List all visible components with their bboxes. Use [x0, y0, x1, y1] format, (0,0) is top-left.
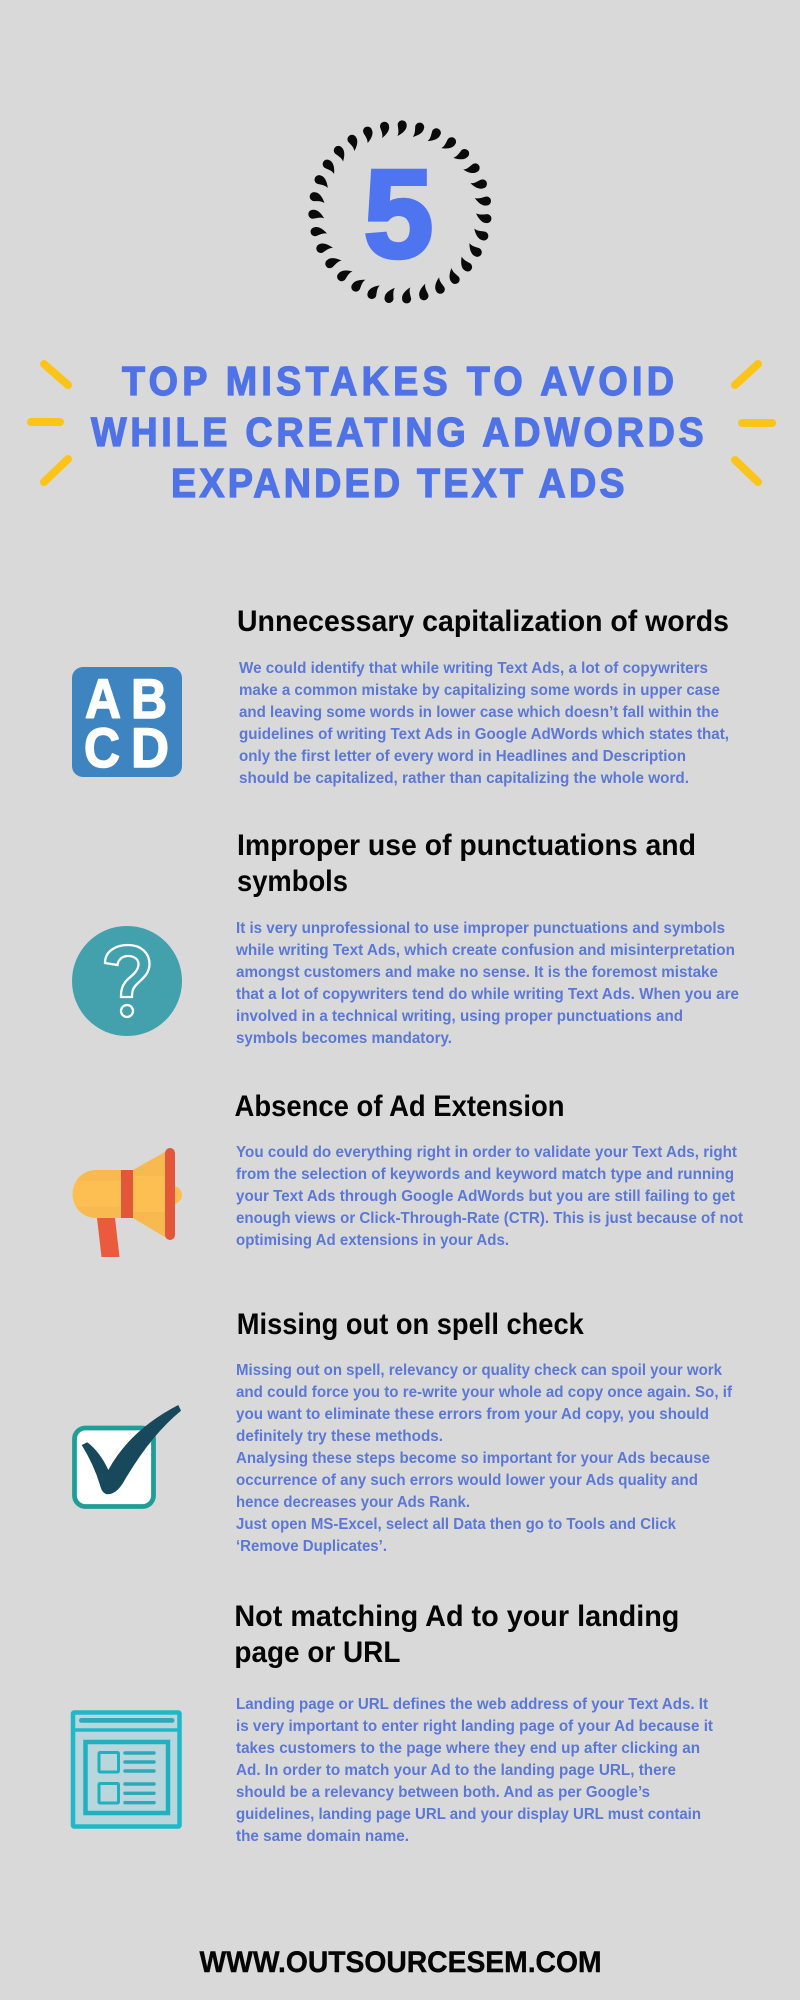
number 5: 5: [364, 146, 433, 284]
icon: ABCD tile: A: [85, 667, 121, 730]
body text: the same domain name.: [236, 1828, 409, 1845]
body text: You could do everything right in order to validate your Text Ads, right: [236, 1144, 738, 1161]
heading: Improper use of punctuations and: [237, 829, 696, 862]
heading: symbols: [237, 865, 348, 898]
badge: number five in a ring of drops: [308, 120, 492, 304]
body text: should be a relevancy between both. And as per Google’s: [236, 1784, 650, 1801]
title: WHILE CREATING ADWORDS: [91, 410, 704, 455]
heading: Missing out on spell check: [237, 1308, 584, 1341]
ring of teardrops: [308, 120, 492, 304]
icon: question mark circle: [72, 926, 182, 1036]
icon: check box: [74, 1405, 181, 1506]
title: [91, 359, 704, 506]
title block with yellow rays: [31, 359, 772, 506]
heading: [234, 1600, 679, 1669]
icon: megaphone: [72, 1148, 182, 1257]
body text: that a lot of copywriters tend do while writing Text Ads. When you are: [236, 986, 739, 1003]
body text: We could identify that while writing Text Ads, a lot of copywriters: [239, 660, 708, 677]
body text: [236, 1696, 714, 1845]
body text: symbols becomes mandatory.: [236, 1030, 452, 1047]
body text: ‘Remove Duplicates’.: [236, 1538, 387, 1555]
heading: Not matching Ad to your landing: [234, 1600, 679, 1633]
heading: page or URL: [234, 1636, 400, 1669]
body text: optimising Ad extensions in your Ads.: [236, 1232, 509, 1249]
body text: only the first letter of every word in Headlines and Description: [239, 748, 686, 765]
body text: hence decreases your Ads Rank.: [236, 1494, 470, 1511]
body text: amongst customers and make no sense. It is the foremost mistake: [236, 964, 718, 981]
title: TOP MISTAKES TO AVOID: [122, 359, 674, 404]
icon: ABCD tile: C: [84, 716, 120, 779]
body text: Analysing these steps become so important for your Ads because: [236, 1450, 710, 1467]
panel: landing page match: [73, 1600, 714, 1845]
body text: Just open MS-Excel, select all Data then go to Tools and Click: [236, 1516, 676, 1533]
heading: [237, 829, 696, 898]
body text: should be capitalized, rather than capitalizing the whole word.: [239, 770, 689, 787]
heading: Absence of Ad Extension: [234, 1090, 564, 1123]
icon: ABCD tile: D: [131, 716, 169, 779]
body text: guidelines, landing page URL and your display URL must contain: [236, 1806, 701, 1823]
icon: ABCD tile: [72, 667, 182, 779]
body text: definitely try these methods.: [236, 1428, 443, 1445]
body text: Missing out on spell, relevancy or quality check can spoil your work: [236, 1362, 722, 1379]
body text: your Text Ads through Google AdWords but you are still failing to get: [236, 1188, 736, 1205]
body text: It is very unprofessional to use improper punctuations and symbols: [236, 920, 725, 937]
panel: absence of ad extension: [72, 1090, 744, 1257]
panel: unnecessary capitalization: [72, 605, 729, 787]
body text: is very important to enter right landing page of your Ad because it: [236, 1718, 714, 1735]
body text: [235, 920, 739, 1047]
body text: involved in a technical writing, using proper punctuations and: [236, 1008, 683, 1025]
yellow rays right: [735, 364, 772, 482]
body text: from the selection of keywords and keyword match type and running: [236, 1166, 734, 1183]
body text: while writing Text Ads, which create confusion and misinterpretation: [235, 942, 735, 959]
body text: takes customers to the page where they end up after clicking an: [236, 1740, 700, 1757]
body text: make a common mistake by capitalizing some words in upper case: [239, 682, 720, 699]
body text: [236, 1362, 733, 1555]
panel: improper punctuation: [72, 829, 739, 1047]
body text: guidelines of writing Text Ads in Google AdWords which states that,: [239, 726, 729, 743]
body text: occurrence of any such errors would lower your Ads quality and: [236, 1472, 698, 1489]
body text: [236, 1144, 744, 1249]
body text: Ad. In order to match your Ad to the landing page URL, there: [236, 1762, 676, 1779]
body text: [239, 660, 729, 787]
body text: and leaving some words in lower case which doesn’t fall within the: [239, 704, 719, 721]
body text: you want to eliminate these errors from your Ad copy, you should: [236, 1406, 709, 1423]
icon: web page layout: [73, 1712, 180, 1826]
body text: enough views or Click-Through-Rate (CTR). This is just because of not: [236, 1210, 744, 1227]
footer website address: WWW.OUTSOURCESEM.COM: [200, 1946, 602, 1979]
body text: and could force you to re-write your whole ad copy once again. So, if: [236, 1384, 733, 1401]
title: EXPANDED TEXT ADS: [171, 461, 625, 506]
panel: missing spell check: [74, 1308, 733, 1555]
body text: Landing page or URL defines the web address of your Text Ads. It: [236, 1696, 709, 1713]
heading: Unnecessary capitalization of words: [237, 605, 729, 638]
icon: ABCD tile: B: [131, 667, 167, 730]
yellow rays left: [31, 364, 68, 482]
